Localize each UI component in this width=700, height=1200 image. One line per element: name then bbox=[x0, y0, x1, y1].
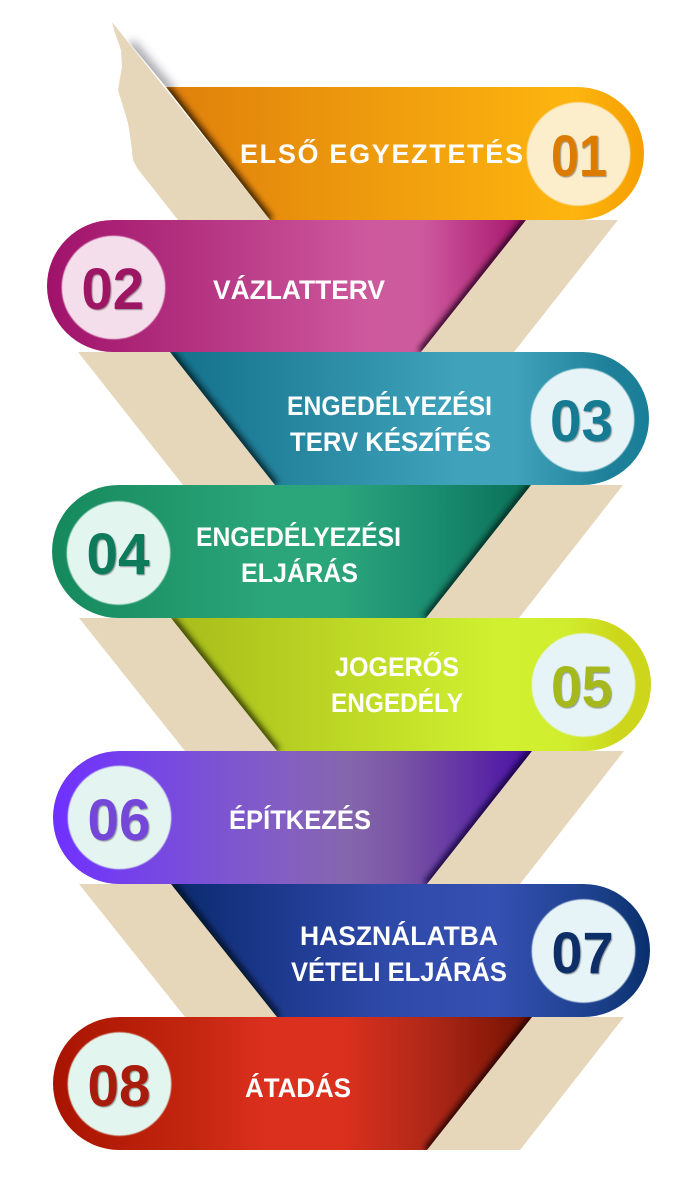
step 4: engedélyezési eljárás bbox=[45, 485, 623, 618]
step 3: engedélyezési terv készítés bbox=[78, 352, 655, 485]
number badge 08 bbox=[68, 1032, 171, 1136]
label 5: ENGEDÉLY bbox=[331, 687, 463, 718]
number badge 05 bbox=[532, 633, 635, 737]
number badge 01: 01 bbox=[551, 124, 607, 189]
label 4: ELJÁRÁS bbox=[241, 557, 358, 588]
beige ribbon 8 bbox=[427, 1017, 624, 1150]
label 1: ELSŐ EGYEZTETÉS bbox=[240, 138, 523, 169]
band 3 bbox=[165, 352, 655, 485]
label 2: VÁZLATTERV bbox=[213, 274, 385, 305]
label 4: ENGEDÉLYEZÉSI bbox=[196, 521, 401, 552]
beige ribbon 2 bbox=[421, 220, 618, 352]
number badge 05: 05 bbox=[551, 655, 612, 720]
top fold shadow bbox=[130, 44, 172, 94]
number badge 07: 07 bbox=[552, 921, 614, 986]
label 6: ÉPÍTKEZÉS bbox=[229, 804, 371, 835]
number badge 06: 06 bbox=[88, 788, 150, 853]
label 7 bbox=[291, 920, 507, 987]
label 3 bbox=[287, 390, 492, 457]
number badge 06 bbox=[68, 766, 171, 869]
band 1 bbox=[160, 87, 650, 220]
beige ribbon 7 bbox=[79, 884, 277, 1017]
step 7: használatba vételi eljárás bbox=[79, 884, 655, 1017]
number badge 02 bbox=[62, 236, 165, 339]
band 5 bbox=[165, 618, 655, 751]
label 3: ENGEDÉLYEZÉSI bbox=[287, 390, 492, 421]
band 7 bbox=[165, 884, 655, 1017]
step 2: vázlatterv bbox=[40, 220, 618, 352]
band 4 bbox=[45, 485, 535, 618]
beige ribbon 5 bbox=[79, 618, 277, 751]
label 7: VÉTELI ELJÁRÁS bbox=[291, 956, 507, 987]
beige ribbon 4 bbox=[426, 485, 623, 618]
label 5 bbox=[331, 651, 463, 718]
label 4 bbox=[196, 521, 401, 588]
number badge 08: 08 bbox=[88, 1054, 150, 1119]
beige ribbon 1 bbox=[112, 22, 270, 220]
label 5: JOGERŐS bbox=[335, 651, 459, 682]
band 6 bbox=[45, 751, 535, 884]
band 2 bbox=[40, 220, 530, 352]
number badge 01 bbox=[527, 102, 630, 206]
number badge 04 bbox=[67, 501, 170, 605]
step 1: első egyeztetés bbox=[112, 22, 650, 220]
number badge 03 bbox=[531, 368, 634, 472]
step 5: jogerős engedély bbox=[79, 618, 655, 751]
band 8 bbox=[45, 1017, 535, 1150]
step 6: építkezés bbox=[45, 751, 624, 884]
label 3: TERV KÉSZÍTÉS bbox=[290, 426, 491, 457]
number badge 02: 02 bbox=[82, 257, 144, 322]
step 8: átadás bbox=[45, 1017, 624, 1150]
label 7: HASZNÁLATBA bbox=[300, 920, 498, 951]
number badge 04: 04 bbox=[86, 522, 150, 587]
beige ribbon 3 bbox=[78, 352, 275, 485]
label 8: ÁTADÁS bbox=[245, 1072, 351, 1103]
number badge 03: 03 bbox=[550, 389, 613, 454]
number badge 07 bbox=[532, 899, 635, 1003]
beige ribbon 6 bbox=[427, 751, 624, 884]
